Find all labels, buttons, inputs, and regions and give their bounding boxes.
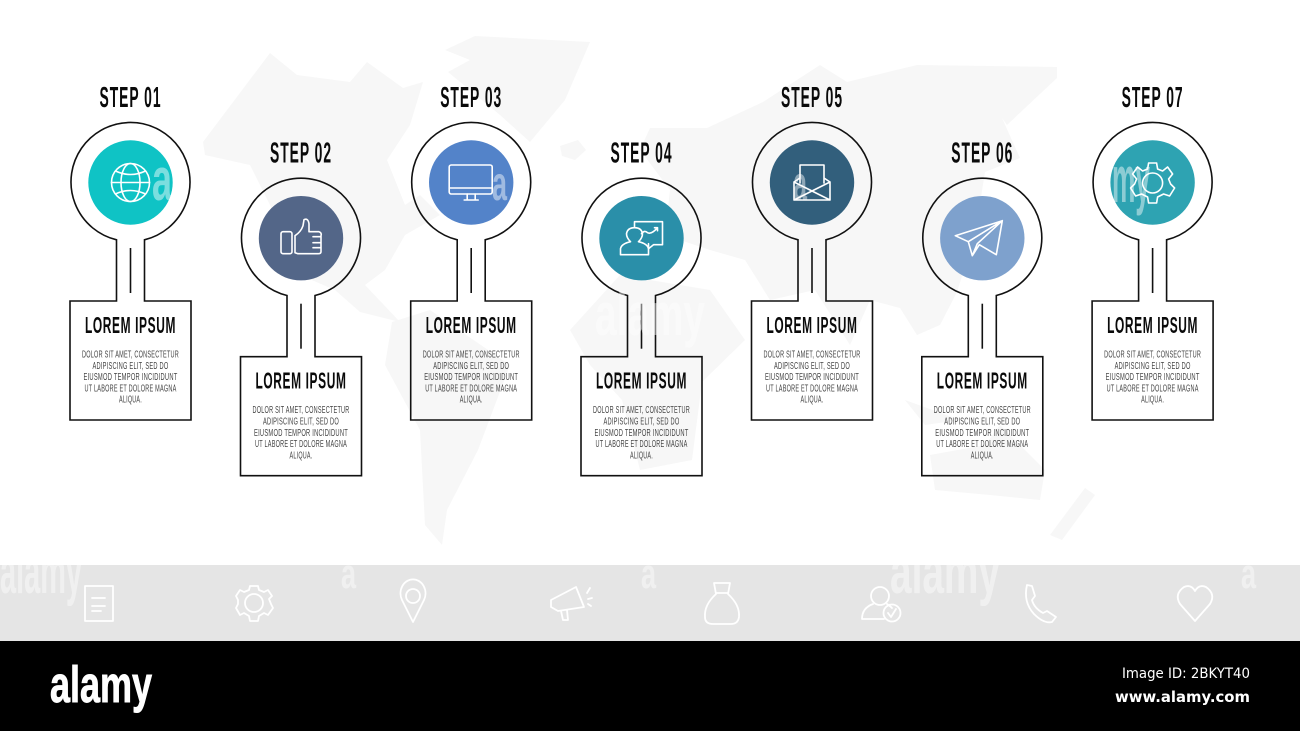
step 03: STEP 03 <box>440 82 502 114</box>
icon disc <box>1110 140 1195 225</box>
connector line <box>640 304 642 349</box>
body text: ALIQUA. <box>630 450 653 461</box>
body text: UT LABORE ET DOLORE MAGNA <box>596 439 688 450</box>
body text <box>593 405 690 461</box>
lorem title: LOREM IPSUM <box>1107 312 1198 338</box>
step 07: STEP 07 <box>1122 82 1184 114</box>
step 05: STEP 05 <box>781 82 843 114</box>
step 04: STEP 04 <box>610 138 672 170</box>
watermarks: a <box>641 550 656 597</box>
icon band <box>0 565 1300 641</box>
body text: ALIQUA. <box>460 395 483 406</box>
body text: ADIPISCING ELIT, SED DO <box>433 361 509 372</box>
lorem title: LOREM IPSUM <box>426 312 517 338</box>
keyhole outline <box>1092 122 1213 420</box>
connector line <box>981 304 983 349</box>
watermarks <box>0 142 1256 607</box>
icon disc <box>88 140 173 225</box>
connector line <box>1152 248 1154 293</box>
icon: thumbs up <box>281 219 321 254</box>
body text: ADIPISCING ELIT, SED DO <box>1115 361 1191 372</box>
body text: ALIQUA. <box>800 395 824 406</box>
body text: DOLOR SIT AMET, CONSECTETUR <box>764 350 860 360</box>
watermarks: my <box>1112 142 1150 216</box>
step 03 <box>411 82 532 420</box>
body text <box>764 350 860 406</box>
body text: EIUSMOD TEMPOR INCIDIDUNT <box>765 372 859 383</box>
keyhole outline <box>581 178 702 476</box>
body text <box>934 405 1031 461</box>
keyhole outline <box>70 122 191 420</box>
body text: UT LABORE ET DOLORE MAGNA <box>936 439 1028 450</box>
body text: EIUSMOD TEMPOR INCIDIDUNT <box>424 372 518 383</box>
world map background <box>203 36 1095 545</box>
body text: UT LABORE ET DOLORE MAGNA <box>255 439 347 450</box>
icon: gear <box>1131 163 1175 203</box>
body text: UT LABORE ET DOLORE MAGNA <box>1107 383 1199 394</box>
body text <box>1104 350 1201 406</box>
icon disc <box>770 140 854 225</box>
connector line <box>300 304 302 349</box>
icon disc <box>940 196 1024 280</box>
body text: ADIPISCING ELIT, SED DO <box>92 361 168 372</box>
watermarks: a <box>492 158 507 211</box>
connector line <box>811 248 813 293</box>
body text: DOLOR SIT AMET, CONSECTETUR <box>934 405 1031 416</box>
band icon: phone <box>1026 585 1056 622</box>
body text: UT LABORE ET DOLORE MAGNA <box>766 383 858 394</box>
watermarks: a <box>341 550 356 597</box>
watermarks: alamy <box>890 538 1000 607</box>
band icon: gear <box>236 586 273 621</box>
lorem title: LOREM IPSUM <box>85 312 176 338</box>
step 01: STEP 01 <box>100 82 162 114</box>
body text: DOLOR SIT AMET, CONSECTETUR <box>1104 350 1201 360</box>
footer bar <box>0 641 1300 731</box>
icon disc <box>259 196 343 280</box>
band icon: heart <box>1178 586 1212 621</box>
step 04 <box>581 138 702 476</box>
icon: globe <box>112 164 150 202</box>
body text: EIUSMOD TEMPOR INCIDIDUNT <box>935 428 1029 439</box>
connector line <box>470 248 472 293</box>
icon: presenter with chart <box>620 222 662 255</box>
lorem title: LOREM IPSUM <box>596 368 687 394</box>
website: www.alamy.com <box>1115 688 1250 706</box>
body text: EIUSMOD TEMPOR INCIDIDUNT <box>594 428 688 439</box>
band icon: map pin <box>400 579 426 622</box>
body text: UT LABORE ET DOLORE MAGNA <box>85 383 177 394</box>
body text: ADIPISCING ELIT, SED DO <box>604 417 680 428</box>
body text: EIUSMOD TEMPOR INCIDIDUNT <box>254 428 348 439</box>
step 07 <box>1092 82 1213 420</box>
step 05 <box>752 82 872 420</box>
body text: DOLOR SIT AMET, CONSECTETUR <box>423 350 520 360</box>
step 02: STEP 02 <box>270 138 332 170</box>
watermarks: alamy <box>0 538 82 607</box>
step 06: STEP 06 <box>951 138 1013 170</box>
watermarks: a <box>1241 550 1256 597</box>
icon: paper plane <box>955 221 1002 256</box>
band icon: clipboard <box>85 586 113 621</box>
body text <box>82 350 179 406</box>
band icon: user with check <box>862 587 900 622</box>
body text: ALIQUA. <box>971 450 994 461</box>
icon disc <box>599 196 684 280</box>
band icon: money bag <box>705 583 739 624</box>
watermarks: alamy <box>595 281 705 348</box>
lorem title: LOREM IPSUM <box>937 368 1028 394</box>
body text: UT LABORE ET DOLORE MAGNA <box>425 383 517 394</box>
body text: EIUSMOD TEMPOR INCIDIDUNT <box>84 372 178 383</box>
body text: ALIQUA. <box>290 450 312 461</box>
step 01 <box>70 82 191 420</box>
band icon: megaphone <box>551 587 592 620</box>
lorem title: LOREM IPSUM <box>256 368 346 394</box>
keyhole outline <box>752 122 872 420</box>
keyhole outline <box>240 178 362 476</box>
image id: Image ID: 2BKYT40 <box>1122 666 1250 682</box>
body text: DOLOR SIT AMET, CONSECTETUR <box>593 405 690 416</box>
body text: ADIPISCING ELIT, SED DO <box>263 417 339 428</box>
body text <box>252 405 350 461</box>
keyhole outline <box>411 122 532 420</box>
body text: ADIPISCING ELIT, SED DO <box>774 361 850 372</box>
body text: EIUSMOD TEMPOR INCIDIDUNT <box>1106 372 1200 383</box>
icon: open envelope <box>794 165 830 200</box>
keyhole outline <box>922 178 1043 476</box>
icon: monitor <box>449 165 492 200</box>
body text: ALIQUA. <box>1141 395 1164 406</box>
body text: DOLOR SIT AMET, CONSECTETUR <box>82 350 179 360</box>
footer logo: alamy <box>50 656 152 713</box>
watermarks: a <box>793 158 807 211</box>
connector line <box>130 248 132 293</box>
body text: ADIPISCING ELIT, SED DO <box>944 417 1020 428</box>
icon disc <box>429 140 513 225</box>
body text: ALIQUA. <box>119 395 142 406</box>
step 06 <box>922 138 1043 476</box>
body text <box>423 350 520 406</box>
lorem title: LOREM IPSUM <box>766 312 858 338</box>
watermarks: a <box>152 146 172 213</box>
step 02 <box>240 138 362 476</box>
body text: DOLOR SIT AMET, CONSECTETUR <box>252 405 350 416</box>
